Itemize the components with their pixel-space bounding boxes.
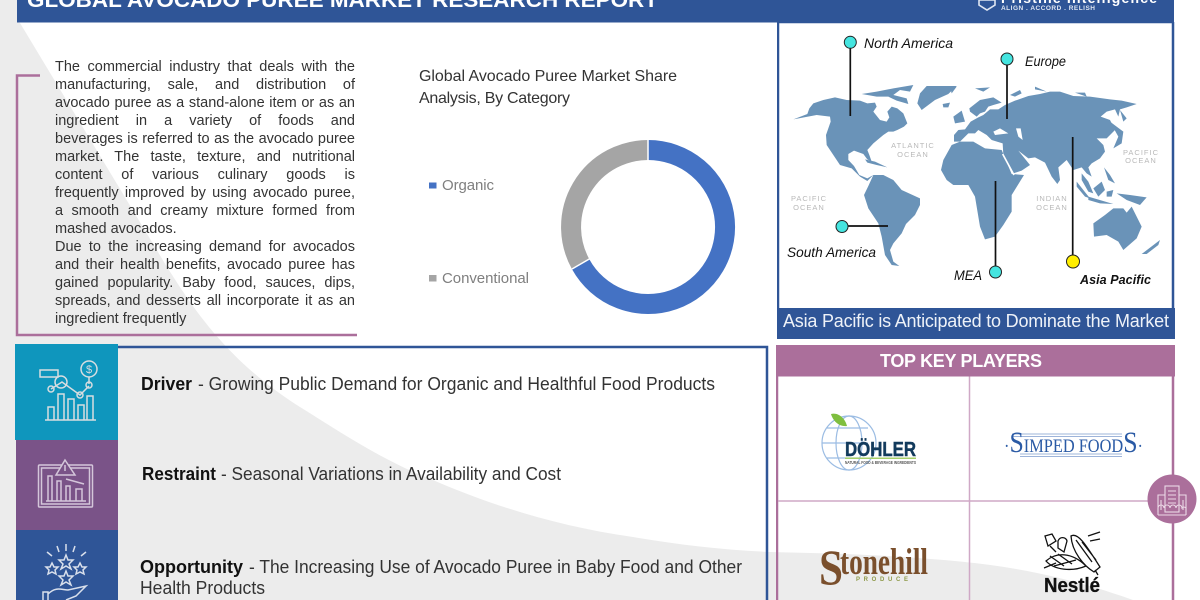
pin: MEA: MEA (954, 267, 982, 283)
logo: Dohler: NATURAL FOOD & BEVERAGE INGREDIENTS (845, 460, 916, 465)
description text: gained popularity. Baby food, sauces, dips, (55, 275, 355, 291)
ocean labels: OCEAN (1036, 203, 1068, 212)
logo: Stonehill: tonehill (840, 542, 928, 583)
panel: regional world map (777, 22, 1175, 339)
panel: market dynamics (15, 344, 768, 600)
pin: Europe (1001, 53, 1066, 119)
icon: building badge (1148, 474, 1196, 524)
icon: stars and hand (43, 544, 86, 600)
header bar (17, 0, 1174, 22)
pin: North America: North America (864, 35, 953, 51)
company logo (979, 0, 1157, 12)
pin: North America (844, 35, 953, 116)
legend: Conventional (442, 270, 529, 287)
icon: restraint chart (38, 460, 92, 507)
pin: South America (787, 220, 888, 260)
opportunity text (140, 557, 742, 598)
description text: The commercial industry that deals with the (55, 59, 355, 75)
pin: Asia Pacific (1066, 137, 1151, 287)
driver text: Driver (141, 374, 192, 394)
description text: beverages is referred to as the avocado puree (55, 131, 355, 147)
restraint block (16, 440, 561, 530)
logo: Stonehill: PRODUCE (856, 577, 908, 583)
description text: manufacturing, sale, and distribution of (55, 77, 355, 93)
ocean labels: INDIAN (1036, 194, 1068, 203)
panel: donut chart (419, 68, 736, 314)
opportunity block (16, 530, 742, 600)
description text: content of various culinary goods is (55, 167, 355, 183)
ocean labels (791, 141, 1159, 212)
panel: market description (16, 74, 357, 336)
pin: Europe: Europe (1025, 53, 1066, 69)
opportunity text: Opportunity (140, 557, 243, 577)
logo: Nestle (1044, 532, 1100, 597)
company logo: ALIGN . ACCORD . RELISH (1001, 5, 1095, 12)
restraint text: - Seasonal Variations in Availability and Cost (221, 464, 561, 484)
description text: a smooth and creamy mixture formed from (55, 203, 355, 219)
description text: mashed avocados. (55, 221, 177, 237)
chart title (419, 68, 677, 107)
description text: avocado puree as a stand-alone item or as an (55, 95, 355, 111)
donut (571, 139, 725, 304)
logo: Stonehill: S (819, 539, 843, 595)
ocean labels: OCEAN (897, 150, 929, 159)
icon: driver chart (40, 361, 97, 420)
logo: Simped Foods: ·SIMPED FOODS· (1004, 426, 1143, 459)
panel heading: TOP KEY PLAYERS (880, 351, 1042, 371)
chart title: Global Avocado Puree Market Share (419, 68, 677, 85)
bracket frame (16, 74, 357, 336)
panel: top key players (776, 345, 1196, 600)
legend (429, 177, 529, 287)
description text: Due to the increasing demand for avocados (55, 239, 355, 255)
logo: Dohler: DÖHLER (845, 438, 916, 461)
map caption: Asia Pacific is Anticipated to Dominate the Market (783, 311, 1169, 331)
description text: ingredient in a variety of foods and (55, 113, 355, 129)
logo: Dohler (822, 414, 916, 470)
logo: Nestle: Nestlé (1044, 575, 1100, 597)
pin: South America: South America (787, 244, 876, 260)
description text: and their health benefits, avocado puree has (55, 257, 355, 273)
description text: ingredient frequently (55, 311, 186, 327)
ocean labels: ATLANTIC (891, 141, 935, 150)
driver text: - Growing Public Demand for Organic and Healthful Food Products (198, 374, 715, 394)
icon: driver chart: $ (86, 364, 92, 376)
description text: market. The taste, texture, and nutritional (55, 149, 355, 165)
description text (55, 59, 356, 327)
pin: MEA (954, 181, 1002, 283)
ocean labels: PACIFIC (1123, 148, 1159, 157)
panel heading (776, 345, 1175, 376)
logo: Stonehill (819, 539, 928, 595)
driver block (15, 344, 715, 440)
ocean labels: OCEAN (1125, 156, 1157, 165)
chart title: Analysis, By Category (419, 90, 570, 107)
restraint text: Restraint (142, 464, 216, 484)
ocean labels: PACIFIC (791, 194, 827, 203)
description text: frequently improved by using avocado puree, (55, 185, 355, 201)
description text: spreads, and desserts all incorporate it as an (55, 293, 355, 309)
world map (793, 85, 1160, 266)
ocean labels: OCEAN (793, 203, 825, 212)
pin: Asia Pacific: Asia Pacific (1079, 273, 1151, 287)
opportunity text: - The Increasing Use of Avocado Puree in Baby Food and Other (249, 557, 742, 577)
opportunity text: Health Products (140, 578, 265, 598)
legend: Organic (442, 177, 494, 194)
map caption (777, 308, 1175, 339)
